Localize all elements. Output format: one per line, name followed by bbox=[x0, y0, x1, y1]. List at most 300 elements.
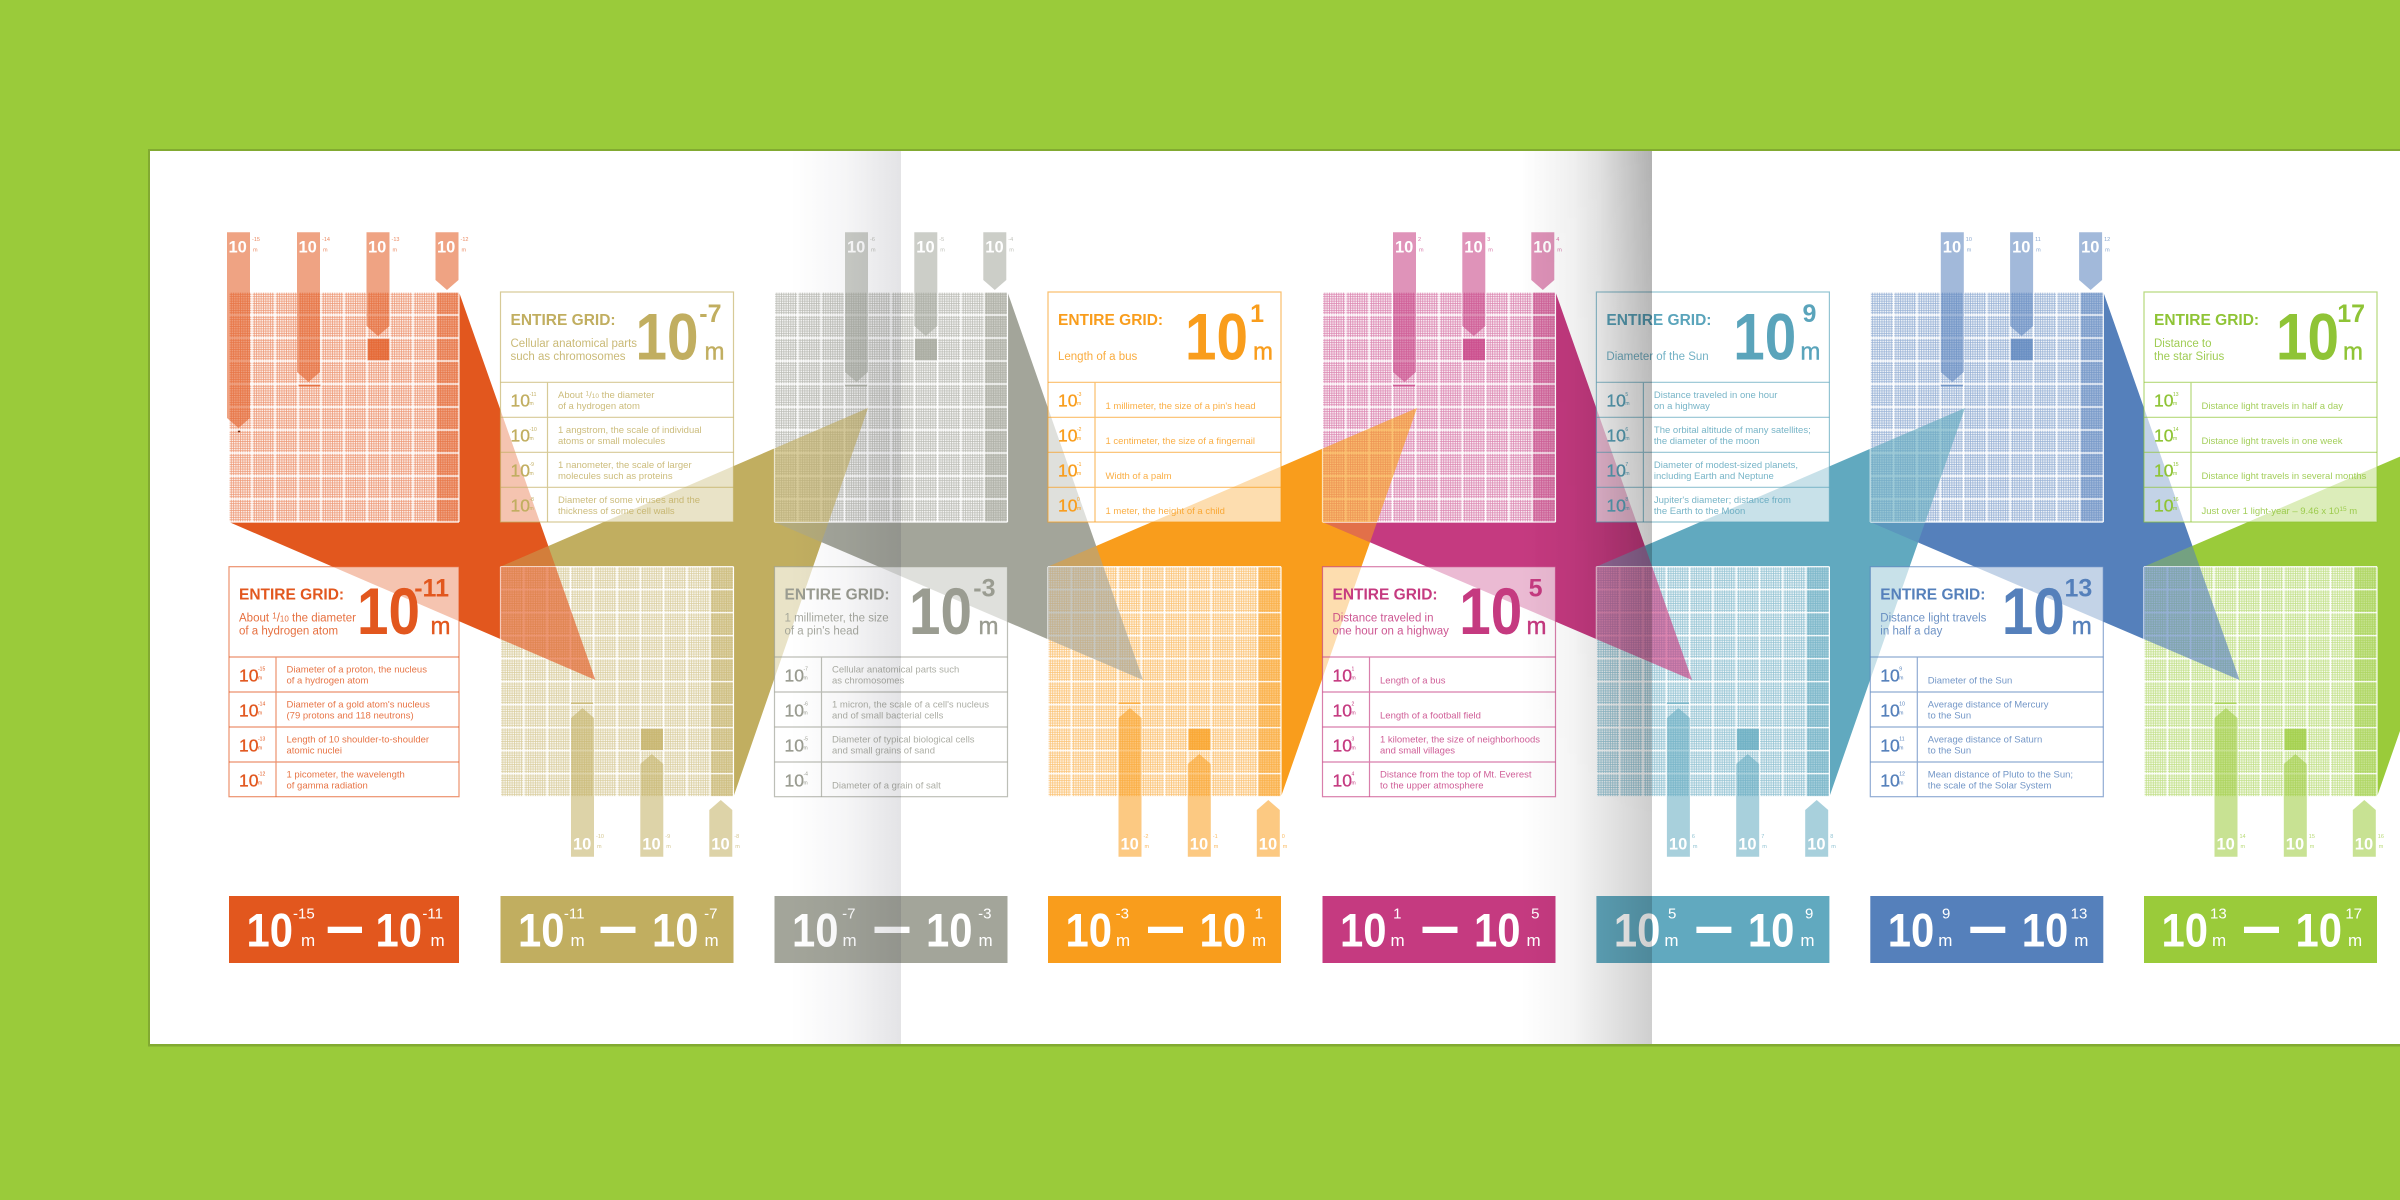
row 10^4: to the upper atmosphere bbox=[1380, 781, 1484, 792]
description: Distance light travels bbox=[1880, 613, 1987, 625]
row 10^-9 bbox=[510, 460, 692, 482]
arrow 10^3: 10 bbox=[1464, 239, 1483, 257]
row 10^-3: -3 bbox=[1077, 392, 1082, 398]
arrows: grid 5 bbox=[1393, 232, 1562, 382]
row 10^16: Just over 1 light-year – 9.46 x 10 bbox=[2202, 506, 2339, 517]
range bar: 10^5 to 10^9: m bbox=[1800, 931, 1815, 950]
arrow 10^-10: -10 bbox=[596, 834, 604, 840]
description: the star Sirius bbox=[2154, 351, 2225, 363]
arrow 10^2: 10 bbox=[1395, 239, 1413, 257]
row 10^-15: Diameter of a proton, the nucleus bbox=[286, 665, 427, 676]
funnel shapes connecting each grid to the next bbox=[229, 292, 2400, 797]
arrow 10^16: m bbox=[2379, 844, 2384, 850]
arrow 10^-6: m bbox=[871, 248, 876, 254]
row 10^5: m bbox=[1625, 401, 1630, 407]
arrow 10^-12: -12 bbox=[460, 237, 468, 243]
row 10^5: 10 bbox=[1606, 391, 1626, 411]
arrow 10^14 bbox=[2214, 708, 2246, 857]
row 10^-5: 10 bbox=[784, 735, 804, 755]
row 10^-2: 10 bbox=[1058, 426, 1078, 446]
arrow 10^-2 bbox=[1118, 708, 1150, 857]
grid 7: blue bbox=[1870, 292, 2103, 522]
description: in half a day bbox=[1880, 626, 1943, 638]
arrow 10^-13: -13 bbox=[392, 237, 399, 243]
arrow 10^0: 0 bbox=[1282, 834, 1285, 840]
row 10^9: 10 bbox=[1880, 665, 1900, 685]
row 10^9: Diameter of the Sun bbox=[1928, 676, 2012, 687]
row 10^9: m bbox=[1899, 676, 1903, 682]
arrow 10^-9: -9 bbox=[665, 834, 670, 840]
range bar: 10^5 to 10^9: m bbox=[1664, 931, 1679, 950]
arrow 10^15: 10 bbox=[2286, 835, 2304, 853]
row 10^-12 bbox=[239, 770, 405, 792]
arrow 10^14: 14 bbox=[2240, 834, 2246, 840]
row 10^-4: m bbox=[804, 781, 808, 787]
row 10^-14: m bbox=[258, 711, 262, 717]
arrow 10^6: 6 bbox=[1692, 834, 1695, 840]
arrow 10^-1: -1 bbox=[1213, 834, 1218, 840]
description: About bbox=[239, 612, 356, 625]
row 10^15: m bbox=[2173, 471, 2177, 477]
row 10^3: 10 bbox=[1332, 735, 1352, 755]
row 10^-6: -6 bbox=[804, 702, 808, 708]
arrow 10^12: 10 bbox=[2081, 239, 2099, 257]
description: 10 the diameter bbox=[280, 613, 356, 625]
description: Distance traveled in bbox=[1332, 613, 1434, 625]
arrow 10^-10 bbox=[571, 708, 604, 857]
range bar: 10^5 to 10^9: 10 bbox=[1614, 904, 1660, 957]
row 10^-7: as chromosomes bbox=[832, 676, 905, 687]
arrow 10^-2: m bbox=[1144, 844, 1150, 850]
row 10^-14: (79 protons and 118 neutrons) bbox=[286, 711, 414, 722]
row 10^-8: 10 bbox=[510, 496, 530, 516]
range bar: 10^-3 to 10^1: -3 bbox=[1116, 905, 1129, 922]
heading: ENTIRE GRID: bbox=[1332, 587, 1438, 604]
row 10^-6: 1 micron, the scale of a cell's nucleus bbox=[832, 700, 989, 711]
row 10^-15: of a hydrogen atom bbox=[286, 676, 368, 687]
row 10^-14: -14 bbox=[258, 702, 265, 708]
arrow 10^4: m bbox=[1557, 248, 1562, 254]
description: one hour on a highway bbox=[1332, 626, 1449, 638]
range bar: 10^-7 to 10^-3: 10 bbox=[792, 904, 838, 957]
card: 10^-7 bbox=[500, 292, 734, 522]
arrow 10^3 bbox=[1462, 232, 1493, 336]
row 10^-10: m bbox=[530, 436, 534, 442]
row 10^-15: -15 bbox=[258, 667, 265, 673]
row 10^12: Mean distance of Pluto to the Sun; bbox=[1928, 770, 2073, 781]
power value: m bbox=[430, 613, 450, 640]
heading: ENTIRE GRID: bbox=[1880, 587, 1985, 604]
row 10^12: 12 bbox=[1899, 772, 1905, 778]
row 10^-11: About bbox=[558, 390, 583, 401]
arrows: grid 4 bbox=[1118, 708, 1288, 857]
range bar: 10^-15 to 10^-11 bbox=[229, 896, 459, 963]
row 10^-9: 1 nanometer, the scale of larger bbox=[558, 460, 692, 471]
row 10^12: 10 bbox=[1880, 770, 1900, 790]
row 10^11 bbox=[1880, 734, 2042, 756]
row 10^6: 6 bbox=[1625, 427, 1628, 433]
arrow 10^14: 10 bbox=[2216, 835, 2235, 853]
range bar: 10^-7 to 10^-3: m bbox=[978, 931, 993, 950]
row 10^-10: atoms or small molecules bbox=[558, 436, 665, 447]
row 10^11: to the Sun bbox=[1928, 746, 1971, 757]
row 10^8: 8 bbox=[1625, 497, 1628, 503]
row 10^-13 bbox=[239, 734, 429, 756]
arrow 10^-4 bbox=[983, 232, 1014, 290]
range bar: 10^-7 to 10^-3: -7 bbox=[842, 905, 856, 922]
row 10^7: m bbox=[1625, 471, 1630, 477]
arrow 10^-15: -15 bbox=[252, 237, 260, 243]
range bar: 10^13 to 10^17 bbox=[2144, 896, 2377, 963]
row 10^-7: Cellular anatomical parts such bbox=[832, 665, 959, 676]
row 10^10 bbox=[1880, 700, 2049, 722]
row 10^10: to the Sun bbox=[1928, 711, 1971, 722]
power value: 9 bbox=[1802, 300, 1816, 328]
arrow 10^4: 4 bbox=[1556, 237, 1559, 243]
arrow 10^-9: 10 bbox=[642, 835, 661, 853]
row 10^5: on a highway bbox=[1654, 401, 1710, 412]
arrow 10^-14: -14 bbox=[322, 237, 330, 243]
arrows: grid 7 bbox=[1941, 232, 2110, 382]
grid 4: orange bbox=[1048, 567, 1281, 797]
arrow 10^7: m bbox=[1762, 844, 1767, 850]
row 10^2: 2 bbox=[1352, 702, 1354, 708]
row 10^-9: molecules such as proteins bbox=[558, 471, 673, 482]
arrows: grid 1 bbox=[227, 232, 468, 428]
range bar: 10^-11 to 10^-7: 10 bbox=[518, 904, 564, 957]
white page bbox=[150, 151, 2400, 1044]
card: 10^-3 bbox=[774, 567, 1008, 797]
arrow 10^-4: 10 bbox=[985, 239, 1004, 257]
funnel tips over the next grid bbox=[500, 408, 2240, 680]
range bar: 10^1 to 10^5: m bbox=[1390, 931, 1405, 950]
range bar: 10^-7 to 10^-3 bbox=[774, 896, 1008, 963]
range bar: 10^9 to 10^13: 10 bbox=[1888, 904, 1934, 957]
arrow 10^-2: -2 bbox=[1144, 834, 1148, 840]
power value: m bbox=[2343, 338, 2363, 365]
row 10^-10: -10 bbox=[530, 427, 537, 433]
row 10^-7: 10 bbox=[784, 665, 804, 685]
row 10^14 bbox=[2154, 426, 2343, 447]
row 10^-11: of a hydrogen atom bbox=[558, 401, 640, 412]
row 10^-1: 10 bbox=[1058, 461, 1078, 481]
row 10^-7: m bbox=[804, 676, 808, 682]
range bar: 10^1 to 10^5: 5 bbox=[1531, 905, 1540, 922]
arrow 10^6: 10 bbox=[1669, 835, 1687, 853]
arrow 10^0: m bbox=[1283, 844, 1288, 850]
arrow 10^-13: 10 bbox=[368, 239, 386, 257]
row 10^14: Distance light travels in one week bbox=[2202, 436, 2343, 447]
range bar: 10^-11 to 10^-7: -11 bbox=[564, 905, 584, 922]
description: Cellular anatomical parts bbox=[510, 338, 637, 350]
range bar: 10^-3 to 10^1 bbox=[1048, 896, 1281, 963]
range bar: 10^-15 to 10^-11: m bbox=[301, 931, 315, 950]
row 10^-4: 10 bbox=[784, 770, 804, 790]
row 10^-12: -12 bbox=[258, 772, 265, 778]
arrow 10^-8: m bbox=[735, 844, 740, 850]
arrow 10^0: 10 bbox=[1259, 835, 1277, 853]
arrow 10^-8: -8 bbox=[734, 834, 739, 840]
row 10^2: m bbox=[1352, 711, 1356, 717]
row 10^7: including Earth and Neptune bbox=[1654, 471, 1774, 482]
row 10^-15 bbox=[239, 664, 427, 686]
arrow 10^-9: m bbox=[666, 844, 671, 850]
row 10^-11: 1 bbox=[585, 390, 589, 397]
power value: -3 bbox=[973, 575, 996, 603]
range bar: 10^9 to 10^13: m bbox=[1938, 931, 1952, 950]
arrow 10^-9 bbox=[640, 754, 671, 857]
arrow 10^11: 10 bbox=[2012, 239, 2030, 257]
range bar: 10^-11 to 10^-7: m bbox=[704, 931, 719, 950]
row 10^16: 15 bbox=[2339, 506, 2347, 513]
row 10^-3: 10 bbox=[1058, 391, 1078, 411]
heading: ENTIRE GRID: bbox=[1058, 312, 1163, 329]
range bar: 10^-7 to 10^-3: 10 bbox=[926, 904, 972, 957]
arrow 10^-8 bbox=[709, 800, 740, 857]
arrow 10^15 bbox=[2284, 754, 2315, 857]
row 10^4: Distance from the top of Mt. Everest bbox=[1380, 770, 1532, 781]
row 10^7: 7 bbox=[1625, 462, 1628, 468]
range bar: 10^1 to 10^5: 10 bbox=[1340, 904, 1386, 957]
row 10^-1 bbox=[1058, 461, 1172, 482]
range bar: 10^1 to 10^5: 10 bbox=[1474, 904, 1520, 957]
arrow 10^0 bbox=[1257, 800, 1288, 857]
row 10^14: 14 bbox=[2173, 427, 2179, 433]
power value: m bbox=[2072, 613, 2092, 640]
row 10^4: 4 bbox=[1352, 772, 1354, 778]
arrow 10^-5 bbox=[914, 232, 945, 336]
row 10^-11: -11 bbox=[530, 392, 537, 398]
arrow 10^11: m bbox=[2036, 248, 2041, 254]
arrow 10^12: m bbox=[2105, 248, 2110, 254]
arrow 10^-8: 10 bbox=[711, 835, 730, 853]
description: Distance to bbox=[2154, 338, 2212, 350]
range bar: 10^-15 to 10^-11: 10 bbox=[376, 904, 422, 957]
power value: 10 bbox=[2002, 574, 2065, 648]
row 10^6: The orbital altitude of many satellites; bbox=[1654, 425, 1811, 436]
page edge shadow bbox=[148, 149, 2400, 1046]
row 10^5 bbox=[1606, 390, 1777, 412]
page fold shadow 2 bbox=[1548, 151, 1652, 1044]
arrows: grid 8 bbox=[2214, 708, 2384, 857]
row 10^-3: m bbox=[1077, 401, 1081, 407]
arrow 10^-14: m bbox=[323, 248, 328, 254]
arrow 10^8: 10 bbox=[1807, 835, 1826, 853]
row 10^13: Distance light travels in half a day bbox=[2202, 401, 2343, 412]
description: 1 bbox=[272, 612, 277, 621]
row 10^-1: m bbox=[1077, 471, 1081, 477]
row 10^15: Distance light travels in several months bbox=[2202, 471, 2366, 482]
card: 10^-11 bbox=[229, 567, 459, 797]
row 10^12: m bbox=[1899, 781, 1903, 787]
arrow 10^16: 10 bbox=[2355, 835, 2373, 853]
row 10^-11: / bbox=[589, 390, 592, 401]
arrow 10^-2: 10 bbox=[1120, 835, 1139, 853]
arrow 10^-1: m bbox=[1214, 844, 1219, 850]
arrow 10^14: m bbox=[2240, 844, 2246, 850]
description: of a hydrogen atom bbox=[239, 626, 338, 638]
heading: ENTIRE GRID: bbox=[1606, 312, 1711, 329]
row 10^-13: Length of 10 shoulder-to-shoulder bbox=[286, 735, 429, 746]
row 10^-8: Diameter of some viruses and the bbox=[558, 495, 700, 506]
arrow 10^2: m bbox=[1419, 248, 1424, 254]
arrow 10^-12: m bbox=[462, 248, 466, 254]
row 10^11: 11 bbox=[1899, 737, 1905, 743]
description: of a pin's head bbox=[784, 626, 859, 638]
arrow 10^10: m bbox=[1967, 248, 1972, 254]
range bar: 10^1 to 10^5: m bbox=[1526, 931, 1541, 950]
row 10^15 bbox=[2154, 461, 2366, 482]
arrow 10^8: m bbox=[1831, 844, 1836, 850]
row 10^-11: m bbox=[530, 401, 534, 407]
arrow 10^-10: m bbox=[597, 844, 602, 850]
row 10^4 bbox=[1332, 770, 1532, 792]
grid 6: teal bbox=[1596, 567, 1829, 797]
power value: m bbox=[1800, 338, 1820, 365]
row 10^-9: -9 bbox=[530, 462, 534, 468]
row 10^0: m bbox=[1077, 506, 1081, 512]
row 10^-10: 1 angstrom, the scale of individual bbox=[558, 425, 702, 436]
row 10^13 bbox=[2154, 391, 2343, 412]
row 10^6 bbox=[1606, 425, 1811, 447]
arrow 10^3: m bbox=[1488, 248, 1493, 254]
row 10^-3: 1 millimeter, the size of a pin's head bbox=[1106, 401, 1256, 412]
arrows: grid 6 bbox=[1667, 708, 1836, 857]
infographic canvas bbox=[148, 149, 2400, 1046]
range bar: 10^9 to 10^13 bbox=[1870, 896, 2103, 963]
row 10^-14: 10 bbox=[239, 700, 259, 720]
range bar: 10^9 to 10^13: 9 bbox=[1942, 905, 1950, 922]
row 10^1: Length of a bus bbox=[1380, 676, 1446, 687]
row 10^0 bbox=[1058, 496, 1225, 517]
row 10^11: 10 bbox=[1880, 735, 1900, 755]
range bar: 10^-15 to 10^-11: -15 bbox=[293, 905, 315, 922]
range bar: 10^-7 to 10^-3: m bbox=[842, 931, 857, 950]
row 10^9 bbox=[1880, 665, 2012, 686]
row 10^7: Diameter of modest-sized planets, bbox=[1654, 460, 1798, 471]
row 10^-11: 10 bbox=[510, 391, 530, 411]
row 10^7: 10 bbox=[1606, 461, 1626, 481]
arrow 10^7: 10 bbox=[1738, 835, 1757, 853]
arrow 10^-15 bbox=[227, 232, 260, 428]
arrow 10^-15: 10 bbox=[228, 239, 247, 257]
row 10^-8: m bbox=[530, 506, 534, 512]
arrow 10^-14: 10 bbox=[298, 239, 317, 257]
row 10^8: Jupiter's diameter; distance from bbox=[1654, 495, 1791, 506]
row 10^-4: Diameter of a grain of salt bbox=[832, 781, 941, 792]
row 10^-13: -13 bbox=[258, 737, 265, 743]
row 10^-13: m bbox=[258, 746, 262, 752]
row 10^-7 bbox=[784, 664, 959, 686]
power value: 1 bbox=[1250, 300, 1264, 328]
arrow 10^-12 bbox=[436, 232, 468, 290]
row 10^1: m bbox=[1352, 676, 1356, 682]
row 10^16 bbox=[2154, 496, 2357, 517]
arrow 10^-10: 10 bbox=[573, 835, 591, 853]
row 10^-12: of gamma radiation bbox=[286, 781, 368, 792]
row 10^2: 10 bbox=[1332, 700, 1352, 720]
row 10^0: 10 bbox=[1058, 496, 1078, 516]
row 10^10: m bbox=[1899, 711, 1903, 717]
row 10^-15: 10 bbox=[239, 665, 259, 685]
row 10^13: 10 bbox=[2154, 391, 2174, 411]
description: such as chromosomes bbox=[510, 351, 626, 363]
row 10^-14 bbox=[239, 700, 430, 722]
row 10^3: 1 kilometer, the size of neighborhoods bbox=[1380, 735, 1540, 746]
row 10^13: 13 bbox=[2173, 392, 2179, 398]
row 10^9: 9 bbox=[1899, 667, 1902, 673]
arrow 10^3: 3 bbox=[1487, 237, 1490, 243]
row 10^4: m bbox=[1352, 781, 1356, 787]
arrow 10^-6 bbox=[845, 232, 876, 382]
row 10^-15: m bbox=[258, 676, 262, 682]
power value: 10 bbox=[1733, 299, 1796, 373]
row 10^2: Length of a football field bbox=[1380, 711, 1481, 722]
row 10^-6 bbox=[784, 700, 989, 722]
arrow 10^4 bbox=[1531, 232, 1562, 290]
arrow 10^11 bbox=[2010, 232, 2041, 336]
range bar: 10^9 to 10^13: m bbox=[2074, 931, 2088, 950]
range bar: 10^13 to 10^17: 10 bbox=[2296, 904, 2342, 957]
row 10^10: 10 bbox=[1880, 700, 1900, 720]
range bar: 10^13 to 10^17: 17 bbox=[2345, 905, 2362, 922]
arrow 10^16 bbox=[2353, 800, 2384, 857]
description: Diameter of the Sun bbox=[1606, 351, 1709, 363]
row 10^-6: m bbox=[804, 711, 808, 717]
range bar: 10^-15 to 10^-11: m bbox=[430, 931, 445, 950]
row 10^0: 1 meter, the height of a child bbox=[1106, 506, 1225, 517]
range bar: 10^9 to 10^13: 10 bbox=[2022, 904, 2068, 957]
arrow 10^8: 8 bbox=[1830, 834, 1833, 840]
row 10^-8: thickness of some cell walls bbox=[558, 506, 675, 517]
row 10^-14: Diameter of a gold atom's nucleus bbox=[286, 700, 430, 711]
row 10^-11 bbox=[510, 390, 654, 412]
arrow 10^-14 bbox=[297, 232, 330, 382]
arrow 10^12 bbox=[2079, 232, 2110, 290]
row 10^-2: m bbox=[1077, 436, 1081, 442]
row 10^8 bbox=[1606, 495, 1791, 517]
row 10^0: 0 bbox=[1077, 497, 1080, 503]
arrow 10^-6: 10 bbox=[847, 239, 865, 257]
power value: 10 bbox=[1459, 574, 1522, 648]
row 10^-5: Diameter of typical biological cells bbox=[832, 735, 975, 746]
card: 10^5 bbox=[1322, 567, 1556, 797]
description: / bbox=[277, 613, 281, 625]
arrows: grid 2 bbox=[571, 708, 740, 857]
row 10^16: 16 bbox=[2173, 497, 2179, 503]
grid 3: grey bbox=[774, 292, 1008, 522]
arrow 10^6: m bbox=[1693, 844, 1698, 850]
range bar: 10^-11 to 10^-7: m bbox=[570, 931, 585, 950]
card: 10^9 bbox=[1596, 292, 1829, 522]
row 10^-8 bbox=[510, 495, 700, 517]
row 10^-1: -1 bbox=[1077, 462, 1082, 468]
card: 10^17 bbox=[2144, 292, 2377, 522]
power value: 10 bbox=[909, 574, 972, 648]
row 10^-1: Width of a palm bbox=[1106, 471, 1172, 482]
row 10^12 bbox=[1880, 770, 2073, 792]
row 10^16: m bbox=[2347, 506, 2357, 517]
range bar: 10^1 to 10^5 bbox=[1322, 896, 1556, 963]
row 10^12: the scale of the Solar System bbox=[1928, 781, 2051, 792]
power value: 10 bbox=[1185, 299, 1248, 373]
row 10^3: m bbox=[1352, 746, 1356, 752]
row 10^2 bbox=[1332, 700, 1481, 722]
row 10^-8: -8 bbox=[530, 497, 534, 503]
arrow 10^-1 bbox=[1188, 754, 1219, 857]
row 10^-9: 10 bbox=[510, 461, 530, 481]
arrow 10^6 bbox=[1667, 708, 1698, 857]
